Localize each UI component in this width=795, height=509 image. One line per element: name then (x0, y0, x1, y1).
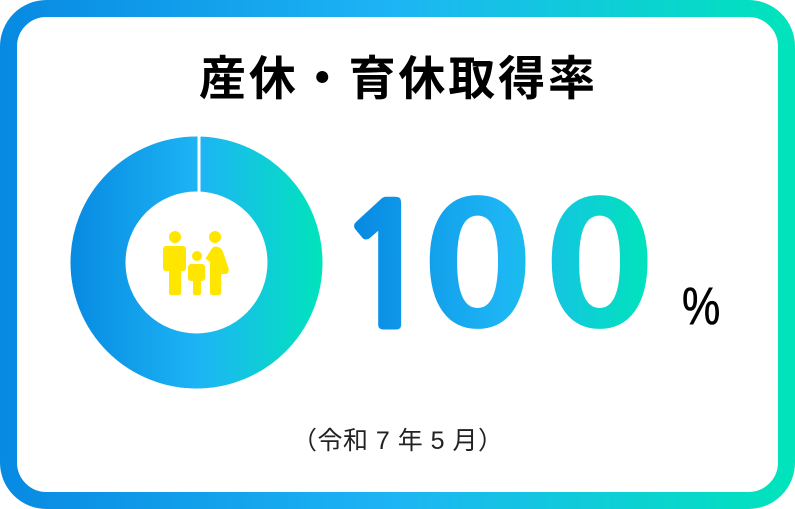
icon: child (188, 251, 205, 295)
title: 産休・育休取得率 (199, 52, 595, 105)
icon: family (163, 231, 229, 295)
donut chart: 100% (98, 134, 295, 361)
date note: （令和 7 年 5 月） (292, 427, 503, 455)
digit 0: 0 (544, 126, 655, 377)
big number: 100 (335, 126, 655, 377)
digit 1: 1 (335, 186, 437, 352)
digit 0: 0 (422, 126, 533, 377)
icon: mother (206, 231, 229, 295)
percent sign: % (682, 278, 720, 336)
icon: father (163, 231, 186, 295)
